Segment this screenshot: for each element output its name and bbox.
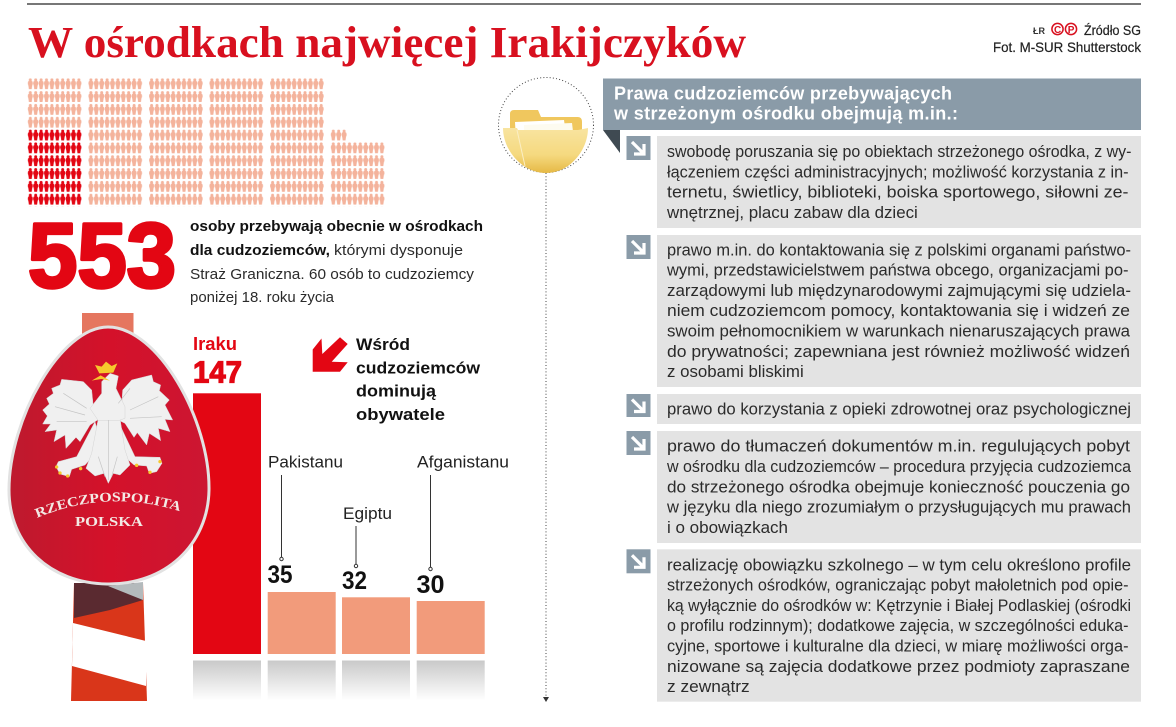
photo: border post with sign xyxy=(8,313,210,701)
callout: dominant nationalities xyxy=(356,335,481,424)
item: schooling xyxy=(626,549,1141,702)
item: contact with authorities xyxy=(626,235,1141,387)
callout: dominant nationalities: dominują xyxy=(356,382,437,401)
source and photo credit: Źródło SG xyxy=(1084,22,1141,38)
item: schooling: strzeżonych ośrodków, ograniczając pobyt małoletnich pod opie- xyxy=(667,576,1128,595)
pictogram: 553 people xyxy=(28,78,385,207)
bar: Egipt: Egiptu xyxy=(343,504,392,523)
bar: Egipt: 32 xyxy=(342,567,367,595)
item: schooling: realizację obowiązku szkolnego – w tym celu określono profile xyxy=(667,555,1131,574)
big number 553: 553 xyxy=(28,205,176,307)
intro text: poniżej 18. roku życia xyxy=(190,289,335,306)
bar chart: nationalities xyxy=(193,334,509,700)
dotted timeline with arrowhead xyxy=(543,173,549,702)
item: contact with authorities: niem cudzoziemcom pomocy, kontaktowania się i widzeń ze xyxy=(667,301,1130,320)
item: translation of documents: i o obowiązkach xyxy=(667,518,788,537)
bar: Irak: 147 xyxy=(193,354,242,390)
source and photo credit xyxy=(993,22,1142,55)
photo: border post with sign: POLSKA xyxy=(75,514,143,529)
arrow: red pointer xyxy=(313,337,348,372)
item: contact with authorities: wymi, przedstawicielstwem państwa obcego, organizacjami po- xyxy=(666,261,1128,280)
callout: dominant nationalities: Wśród xyxy=(356,335,410,354)
panel: rights of foreigners xyxy=(603,78,1141,702)
bar: Pakistan: Pakistanu xyxy=(268,453,343,472)
callout: dominant nationalities: obywatele xyxy=(356,405,445,424)
item: translation of documents: prawo do tłumaczeń dokumentów m.in. regulujących pobyt xyxy=(667,437,1130,456)
intro text xyxy=(190,218,483,306)
intro text: którymi dysponuje xyxy=(334,242,463,259)
panel heading: Prawa cudzoziemców przebywających xyxy=(614,83,952,103)
intro text: osoby przebywają obecnie w ośrodkach xyxy=(190,218,483,235)
icon: copyright marks xyxy=(1052,23,1077,36)
eagle emblem xyxy=(43,362,173,483)
item: freedom of movement: ternetu, świetlicy, biblioteki, boiska sportowego, siłowni ze- xyxy=(667,183,1128,202)
bar: Pakistan: 35 xyxy=(268,561,293,589)
item: schooling: ką wyłącznie do ośrodków w: Kętrzynie i Białej Podlaskiej (ośrodki xyxy=(667,596,1131,615)
bar: Irak: Iraku xyxy=(193,334,237,354)
bar: Afganistan: Afganistanu xyxy=(417,453,509,472)
item: freedom of movement: wnętrznej, placu zabaw dla dzieci xyxy=(666,203,918,222)
bar: Afganistan xyxy=(416,453,509,700)
item: schooling: z zewnątrz xyxy=(667,677,750,696)
title: W ośrodkach najwięcej Irakijczyków xyxy=(28,18,746,67)
item: schooling: cyjne, sportowe i kulturalne dla dzieci, w miarę możliwości orga- xyxy=(667,636,1128,656)
item: translation of documents: w języku dla niego zrozumiałym o przysługujących mu prawach xyxy=(666,498,1131,517)
sign xyxy=(9,327,209,584)
intro text: dla cudzoziemców, xyxy=(190,242,330,259)
intro text: Straż Graniczna. 60 osób to cudzoziemcy xyxy=(190,266,475,283)
bar: Egipt xyxy=(342,504,410,700)
icon: folder in dotted circle xyxy=(498,78,594,173)
item: translation of documents xyxy=(626,431,1141,543)
item: contact with authorities: z osobami bliskimi xyxy=(667,362,804,381)
callout: dominant nationalities: cudzoziemców xyxy=(356,358,481,377)
panel heading xyxy=(603,78,1141,153)
item: contact with authorities: do prywatności; zapewniana jest również możliwość widzeń xyxy=(667,342,1130,361)
item: contact with authorities: prawo m.in. do kontaktowania się z polskimi organami państwo- xyxy=(667,240,1131,259)
item: contact with authorities: zarządowymi lub międzynarodowymi zajmującymi się udziela- xyxy=(667,281,1131,300)
item: health care xyxy=(626,394,1141,424)
bar: Pakistan xyxy=(268,453,343,700)
item: translation of documents: do strzeżonego ośrodka obejmuje konieczność pouczenia go xyxy=(667,477,1130,496)
source and photo credit: Fot. M-SUR Shutterstock xyxy=(993,39,1142,55)
item: health care: prawo do korzystania z opieki zdrowotnej oraz psychologicznej xyxy=(667,399,1131,418)
bar: Afganistan: 30 xyxy=(416,571,444,599)
bar: Irak xyxy=(193,334,261,700)
sign lettering: RZECZPOSPOLITA xyxy=(34,492,180,518)
source and photo credit: ŁR xyxy=(1033,26,1045,36)
item: contact with authorities: swoim pełnomocnikiem w warunkach nienaruszających prawa xyxy=(667,322,1131,340)
item: schooling: o profilu rodzinnym); dodatkowe zajęcia, w szczególności eduka- xyxy=(667,616,1128,635)
panel heading: w strzeżonym ośrodku obejmują m.in.: xyxy=(613,103,958,123)
item: freedom of movement xyxy=(626,136,1141,228)
icon: copyright marks: P xyxy=(1068,25,1075,36)
icon: copyright marks: C xyxy=(1054,25,1061,36)
item: translation of documents: w ośrodku dla cudzoziemców – procedura przyjęcia cudzoziemca xyxy=(666,457,1132,476)
item: freedom of movement: łączeniem części administracyjnych; możliwość korzystania z in- xyxy=(667,162,1128,181)
item: freedom of movement: swobodę poruszania się po obiektach strzeżonego ośrodka, z wy- xyxy=(667,142,1131,161)
item: schooling: nizowane są zajęcia dodatkowe przez podmioty zapraszane xyxy=(667,657,1130,676)
